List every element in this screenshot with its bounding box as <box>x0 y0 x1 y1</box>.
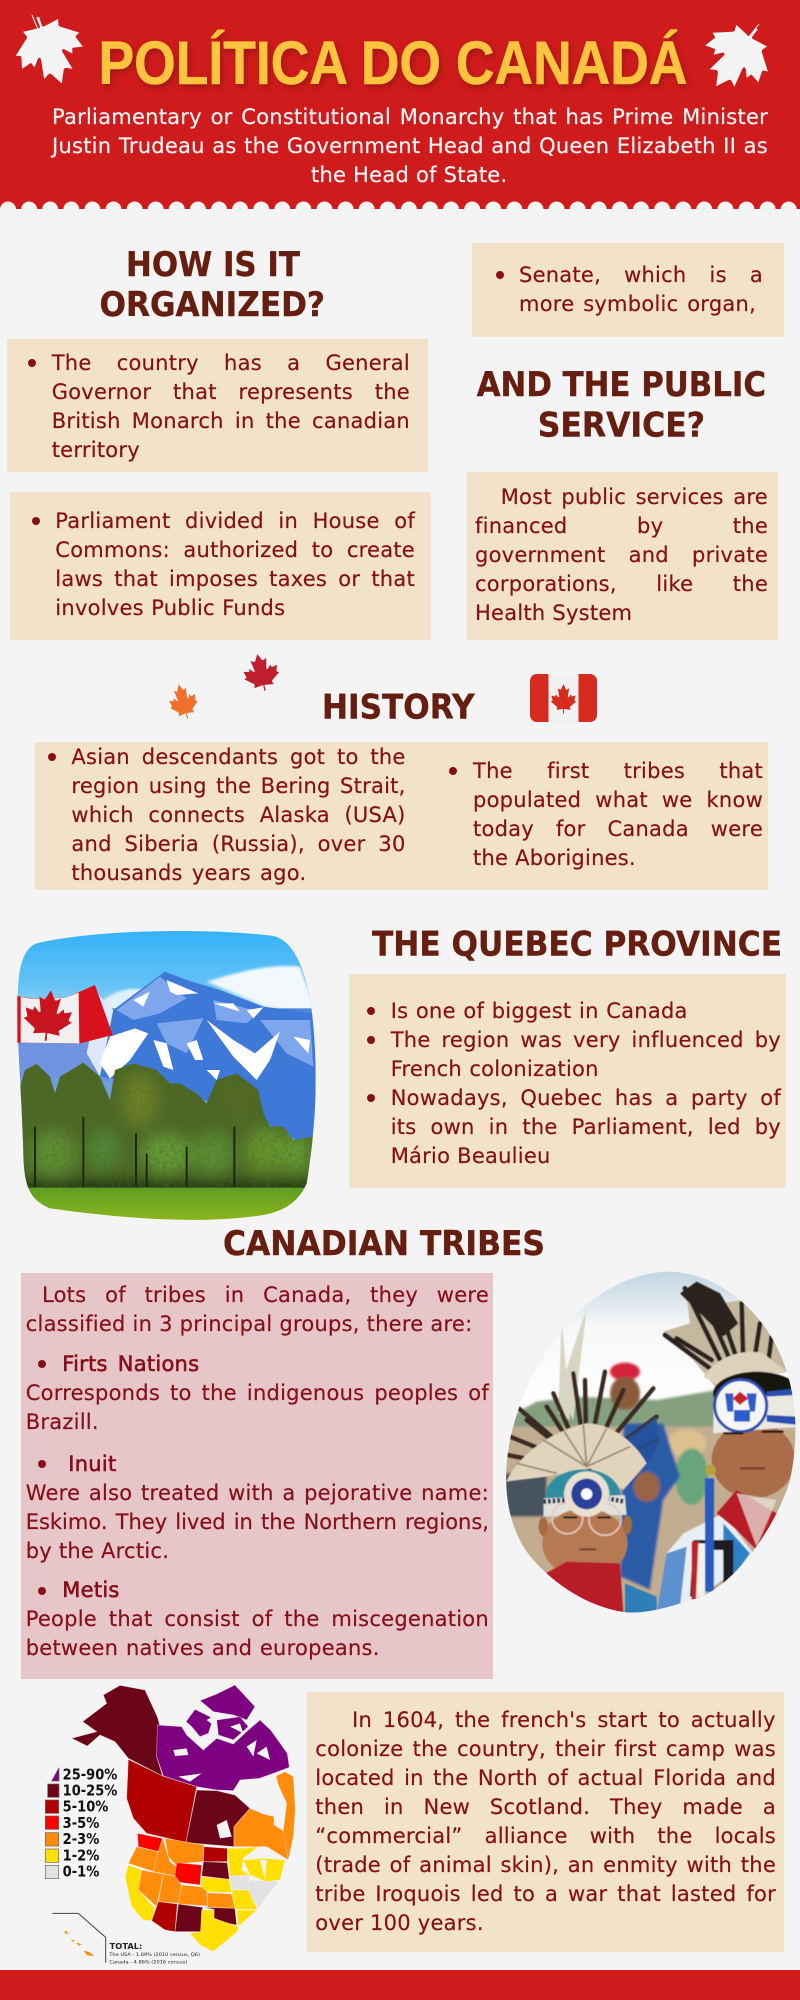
panel: french colonization: In 1604, the french's start to actually <box>352 1708 776 1732</box>
scalloped header edge <box>0 201 800 218</box>
panel: canadian tribes: Brazill. <box>26 1410 99 1434</box>
icon: canadian flag <box>530 674 597 722</box>
panel: french colonization: then in New Scotland. They made a <box>315 1795 776 1819</box>
flag inside photo <box>17 985 113 1043</box>
heading: history: HISTORY <box>322 688 475 727</box>
panel: senate: more symbolic organ, <box>519 292 756 316</box>
panel: parliament: laws that imposes taxes or that <box>55 567 415 591</box>
panel: public services: corporations, like the <box>475 572 768 596</box>
panel: general governor: territory <box>52 438 140 462</box>
heading: how is it organized: ORGANIZED? <box>100 285 325 324</box>
panel: history: Asian descendants got to the <box>71 745 406 769</box>
panel: french colonization: tribe Iroquois led to a war that lasted for <box>315 1882 776 1906</box>
icon: white maple leaf left <box>6 6 94 95</box>
heading: how is it organized <box>100 245 325 324</box>
title: POLÍTICA DO CANADÁ <box>98 29 688 97</box>
icon: white maple leaf right <box>688 9 784 106</box>
map legend: 25-90% <box>63 1766 118 1783</box>
panel: history: the Aborigines. <box>473 846 636 870</box>
header subtitle <box>50 105 768 187</box>
panel: public services: Health System <box>475 601 632 625</box>
heading: canadian tribes: CANADIAN TRIBES <box>223 1224 545 1263</box>
map lakes and bays <box>173 1713 270 1880</box>
heading: how is it organized: HOW IS IT <box>126 245 300 284</box>
heading: and the public service: AND THE PUBLIC <box>477 365 766 404</box>
panel: public services <box>467 472 778 640</box>
panel: canadian tribes: Were also treated with a pejorative name: <box>26 1481 489 1505</box>
map totals: The USA - 1.69% (2010 census, Q6) <box>108 1952 200 1958</box>
heading: and the public service <box>477 365 766 445</box>
panel: parliament: involves Public Funds <box>55 596 285 620</box>
header subtitle: Justin Trudeau as the Government Head and Queen Elizabeth II as <box>52 134 768 158</box>
panel: canadian tribes: Metis <box>62 1578 120 1602</box>
panel: history: today for Canada were <box>473 817 763 841</box>
panel: general governor: The country has a General <box>52 351 410 375</box>
left child headdress <box>506 1308 658 1613</box>
panel: canadian tribes: People that consist of the miscegenation <box>26 1607 489 1631</box>
panel: quebec province <box>349 974 786 1188</box>
panel: canadian tribes: between natives and europeans. <box>26 1636 380 1660</box>
map legend: 5-10% <box>63 1799 109 1816</box>
panel: general governor <box>7 339 428 472</box>
panel: quebec province: Nowadays, Quebec has a party of <box>391 1086 781 1110</box>
right child headdress <box>657 1282 800 1613</box>
header band <box>0 0 800 209</box>
panel: quebec province: Mário Beaulieu <box>391 1144 551 1168</box>
panel: canadian tribes: Eskimo. They lived in the Northern regions, <box>26 1510 489 1534</box>
panel: french colonization <box>307 1692 784 1952</box>
header subtitle: Parliamentary or Constitutional Monarchy that has Prime Minister <box>52 105 768 129</box>
panel: quebec province: French colonization <box>391 1057 599 1081</box>
heading: the quebec province: THE QUEBEC PROVINCE <box>372 925 782 964</box>
panel: canadian tribes: by the Arctic. <box>26 1539 169 1563</box>
panel: history: thousands years ago. <box>71 861 306 885</box>
map legend: 10-25% <box>63 1782 118 1799</box>
panel: french colonization: (trade of animal skin), an enmity with the <box>315 1853 776 1877</box>
panel: public services: government and private <box>475 543 768 567</box>
panel: senate <box>472 243 784 337</box>
panel: history: which connects Alaska (USA) <box>71 803 406 827</box>
map legend: 1-2% <box>63 1847 100 1864</box>
panel: public services: financed by the <box>475 514 768 538</box>
icon: red maple leaf <box>240 650 282 694</box>
panel: french colonization: “commercial” alliance with the locals <box>315 1824 776 1848</box>
map legend: 2-3% <box>63 1831 100 1848</box>
map: north america indigenous population <box>45 1685 295 1965</box>
panel: french colonization: colonize the country, their first camp was <box>315 1737 776 1761</box>
panel: history <box>35 742 768 890</box>
photo: mountain landscape with flag <box>17 931 316 1220</box>
map legend: 3-5% <box>63 1815 100 1832</box>
panel: canadian tribes <box>21 1273 493 1679</box>
panel: canadian tribes: Corresponds to the indigenous peoples of <box>26 1381 489 1405</box>
panel: french colonization: over 100 years. <box>315 1911 484 1935</box>
map legend <box>45 1766 118 1881</box>
panel: history: populated what we know <box>473 788 763 812</box>
header subtitle: the Head of State. <box>311 163 507 187</box>
panel: history: and Siberia (Russia), over 30 <box>71 832 406 856</box>
tree mass <box>20 1062 313 1188</box>
panel: parliament: Commons: authorized to create <box>55 538 415 562</box>
panel: french colonization: located in the North of actual Florida and <box>315 1766 776 1790</box>
footer band <box>0 1970 800 2000</box>
panel: canadian tribes: Inuit <box>68 1452 116 1476</box>
heading: and the public service: SERVICE? <box>538 406 705 445</box>
panel: history: region using the Bering Strait, <box>71 774 406 798</box>
panel: history: The first tribes that <box>473 759 763 783</box>
panel: canadian tribes: Lots of tribes in Canada, they were <box>42 1283 489 1307</box>
panel: quebec province: its own in the Parliament, led by <box>391 1115 781 1139</box>
panel: general governor: Governor that represents the <box>52 380 410 404</box>
panel: quebec province: Is one of biggest in Canada <box>391 999 688 1023</box>
photo: two indigenous children in headdresses <box>506 1272 796 1613</box>
map totals <box>108 1942 200 1965</box>
map hawaii inset <box>52 1913 106 1963</box>
panel: parliament <box>10 492 431 640</box>
map legend: 0-1% <box>63 1864 100 1881</box>
panel: public services: Most public services are <box>501 485 768 509</box>
map regions <box>72 1685 295 1952</box>
map totals: TOTAL: <box>110 1942 142 1951</box>
panel: general governor: British Monarch in the canadian <box>52 409 410 433</box>
panel: canadian tribes: classified in 3 principal groups, there are: <box>26 1312 472 1336</box>
map totals: Canada - 4.86% (2016 census) <box>109 1959 188 1965</box>
icon: orange maple leaf <box>165 681 201 722</box>
panel: senate: Senate, which is a <box>519 263 763 287</box>
panel: quebec province: The region was very influenced by <box>391 1028 781 1052</box>
panel: canadian tribes: Firts Nations <box>62 1352 199 1376</box>
panel: parliament: Parliament divided in House of <box>55 509 415 533</box>
